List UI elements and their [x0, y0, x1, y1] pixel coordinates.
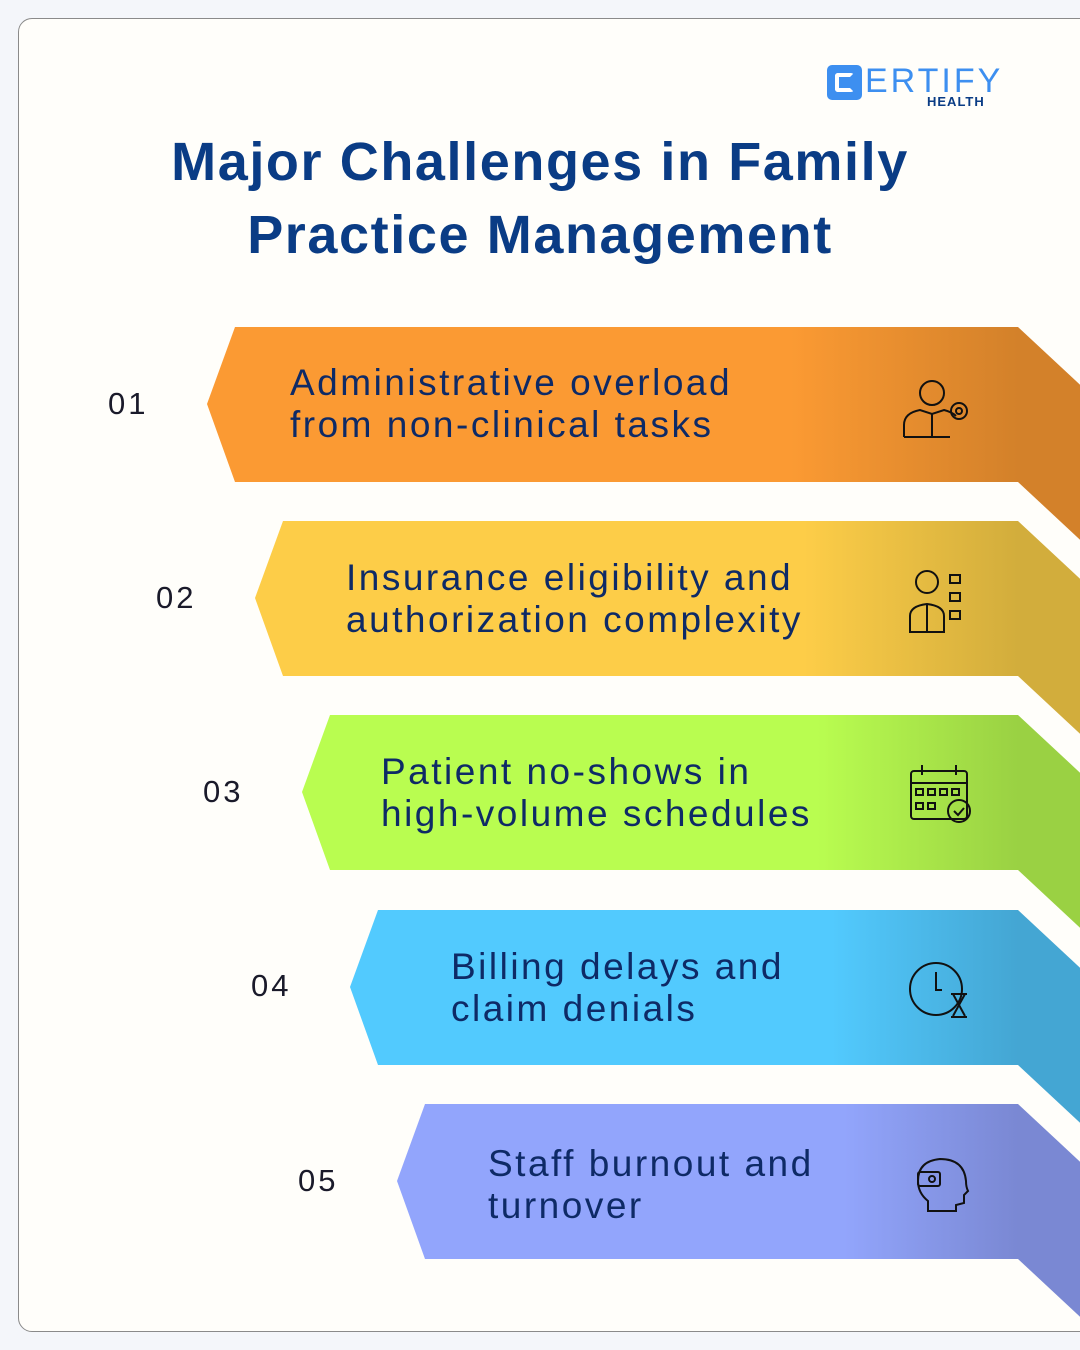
- title: Practice Management: [247, 205, 833, 265]
- logo: ERTIFY: [865, 62, 1003, 100]
- text 2: [346, 557, 803, 640]
- icon: clock hourglass: [910, 963, 967, 1017]
- text 5: turnover: [488, 1185, 644, 1226]
- title: Major Challenges in Family: [171, 132, 909, 192]
- band 2: [255, 521, 1080, 743]
- band 3: [302, 715, 1080, 937]
- text: 03: [203, 774, 243, 809]
- icon: head: [918, 1159, 968, 1211]
- text 4: claim denials: [451, 988, 697, 1029]
- title: [171, 132, 909, 265]
- band 4: [350, 910, 1080, 1132]
- text 1: Administrative overload: [290, 362, 732, 403]
- text 4: Billing delays and: [451, 946, 784, 987]
- text 2: Insurance eligibility and: [346, 557, 793, 598]
- text: 04: [251, 968, 291, 1003]
- text 1: from non-clinical tasks: [290, 404, 714, 445]
- logo: [827, 62, 1003, 109]
- icon: calendar: [911, 765, 970, 822]
- text 5: [488, 1143, 814, 1226]
- text 3: high-volume schedules: [381, 793, 812, 834]
- band 5: [397, 1104, 1080, 1326]
- text 1: [290, 362, 732, 445]
- icon: person checklist: [910, 571, 960, 632]
- text: 05: [298, 1163, 338, 1198]
- band 1: [207, 327, 1080, 549]
- text 2: authorization complexity: [346, 599, 803, 640]
- text 5: Staff burnout and: [488, 1143, 814, 1184]
- text 4: [451, 946, 784, 1029]
- icon: person gear: [904, 381, 967, 437]
- logo: HEALTH: [927, 94, 985, 109]
- text 3: [381, 751, 812, 834]
- numbers: 01: [108, 386, 148, 421]
- text 3: Patient no-shows in: [381, 751, 751, 792]
- text: 02: [156, 580, 196, 615]
